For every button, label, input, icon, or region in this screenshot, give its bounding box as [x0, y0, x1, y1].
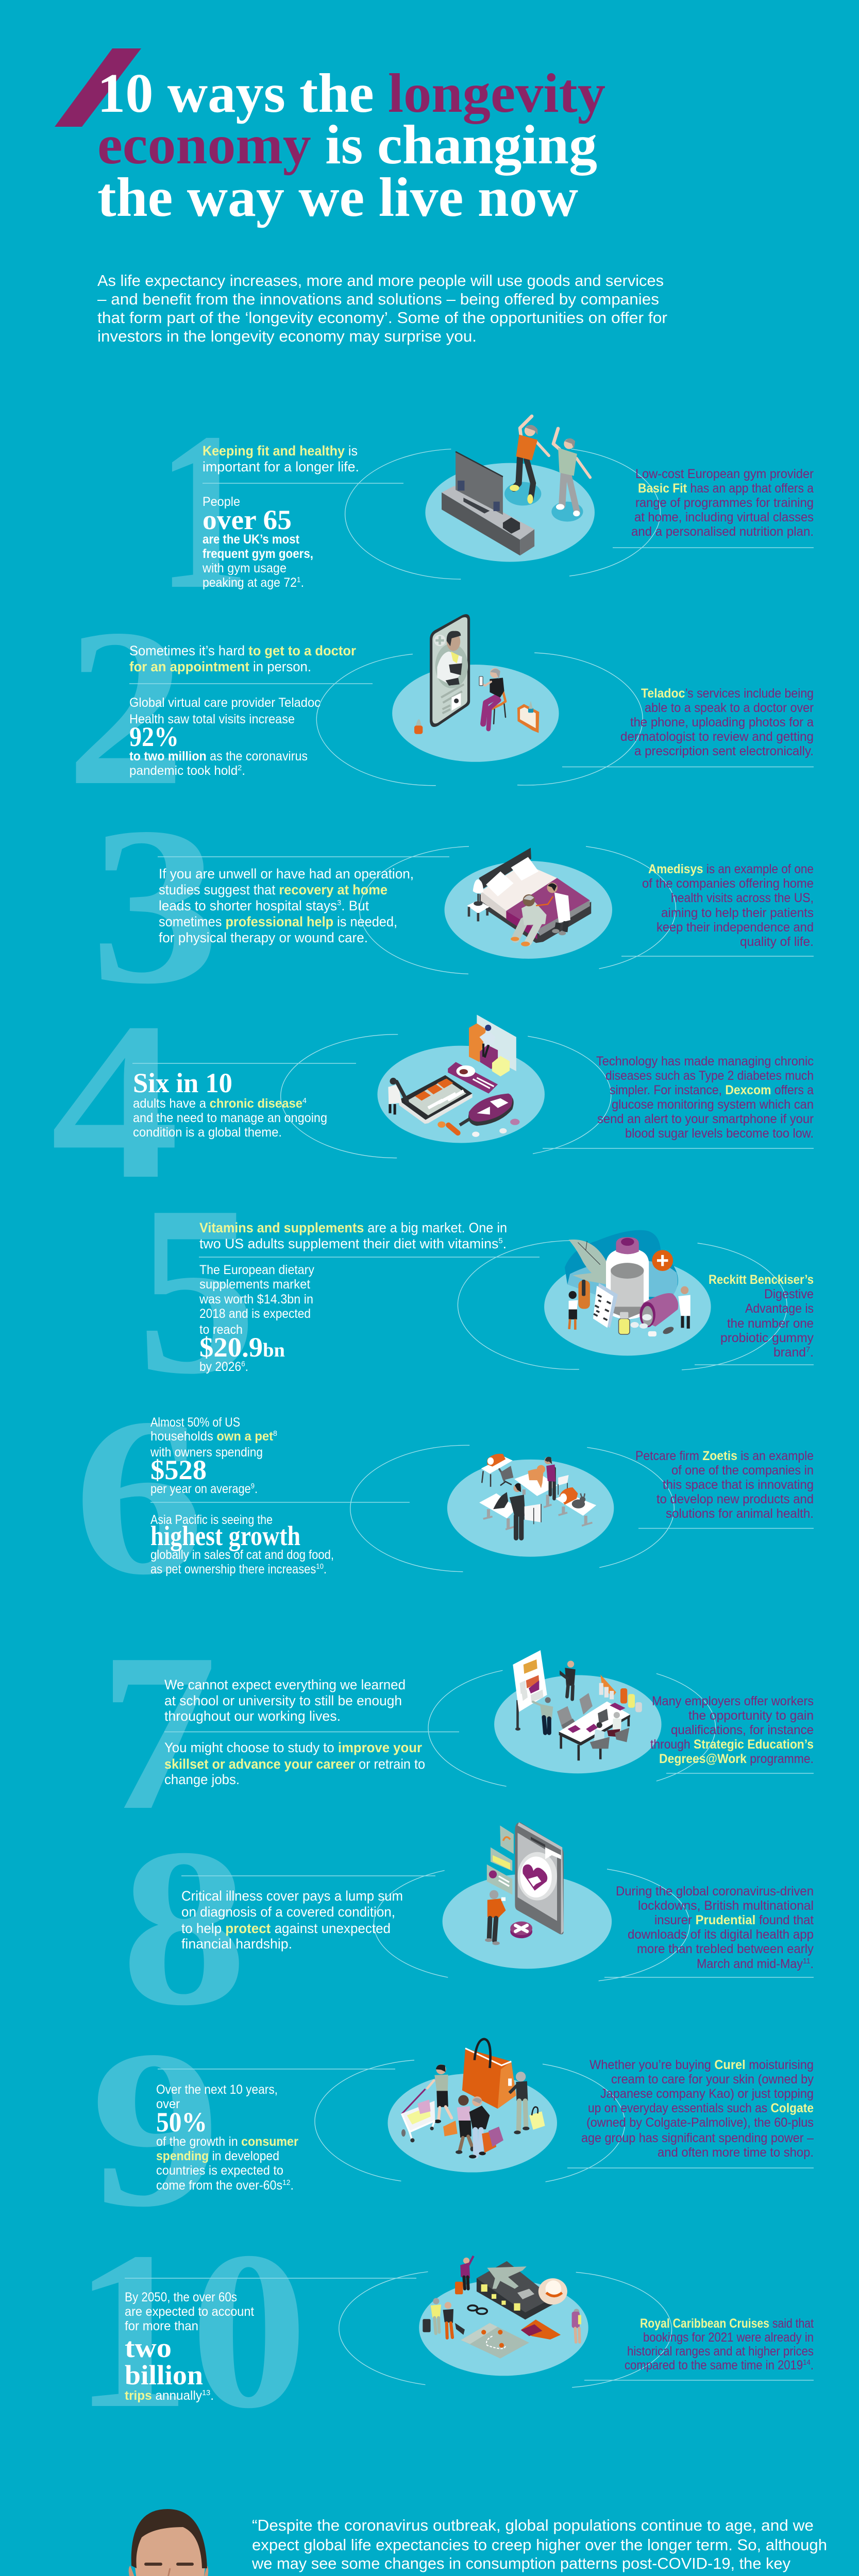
company note: Royal Caribbean: . — [811, 2358, 814, 2372]
company note: Zoetis: Petcare firm Zoetis is an example — [635, 1449, 814, 1463]
company note: Dexcom: glucose monitoring system which can — [612, 1097, 814, 1112]
stat: two billion trips: . — [210, 2388, 214, 2403]
company note: Prudential: more than trebled between early — [637, 1942, 814, 1956]
text: recovery at home: sometimes professional help is needed, — [159, 914, 397, 929]
text: critical illness: to help protect against unexpected — [181, 1921, 391, 1936]
company note: Curel and Colgate: (owned by Colgate-Palmolive), the 60-plus — [586, 2115, 814, 2130]
company note: Prudential: downloads of its digital health app — [628, 1927, 814, 1942]
company note: Reckitt Benckiser: Digestive — [764, 1287, 814, 1301]
text: keep learning: We cannot expect everything we learned — [164, 1677, 406, 1692]
stat: highest growth: globally in sales of cat and dog food, — [150, 1548, 334, 1562]
text: vitamins and supplements — [199, 1220, 540, 1257]
stat: $20.9bn: by 2026 — [199, 1360, 245, 1374]
numeral 3: 3 — [90, 781, 220, 1030]
panel: item 7 lifelong learning — [99, 1607, 814, 1857]
company note: Teladoc: a prescription sent electronically. — [634, 744, 814, 758]
numeral 6: 6 — [74, 1371, 205, 1621]
stat: over 65: 1 — [297, 575, 301, 584]
company note: Reckitt Benckiser — [695, 1273, 814, 1365]
company note: Prudential: During the global coronavirus-driven — [616, 1884, 814, 1899]
stat: 50%: . — [291, 2178, 294, 2193]
stat: own a pet — [150, 1415, 410, 1502]
panel: item 8 critical illness cover — [121, 1802, 814, 2052]
company note: Reckitt Benckiser: Reckitt Benckiser’s — [709, 1273, 814, 1287]
stat: over 65: peaking at age 72 — [203, 575, 305, 590]
stat: own a pet: Almost 50% of US — [150, 1415, 240, 1430]
company note: Teladoc: the phone, uploading photos for a — [630, 715, 814, 730]
illustration: woman consulting doctor on phone — [316, 614, 643, 786]
illustration: glucose monitor and smartphone — [281, 1014, 611, 1158]
stat: $20.9bn: was worth $14.3bn in — [199, 1292, 313, 1307]
stat: over 65: with gym usage — [202, 561, 287, 575]
company note: Dexcom: simpler. For instance, Dexcom offers a — [610, 1083, 814, 1097]
stat: two billion trips: By 2050, the over 60s — [125, 2290, 237, 2304]
company note: Amedisys: of the companies offering home — [642, 876, 814, 891]
stat: six in 10: Six in 10 — [133, 1067, 232, 1098]
stat: $20.9bn: $20.9bn — [199, 1332, 285, 1363]
intro text: – and benefit from the innovations and solutions – being offered by companies — [97, 290, 659, 308]
intro text: As life expectancy increases, more and more people will use goods and services — [97, 272, 664, 290]
stat: two billion trips: 13 — [202, 2388, 210, 2397]
company note: Royal Caribbean: compared to the same time in 2019 — [625, 2358, 827, 2372]
text: vitamins and supplements: . — [503, 1236, 507, 1251]
stat: highest growth: highest growth — [150, 1520, 300, 1551]
stat: 50%: countries is expected to — [156, 2163, 283, 2178]
company note: Reckitt Benckiser: the number one — [727, 1316, 814, 1331]
text: recovery at home: studies suggest that recovery at home — [159, 882, 388, 897]
stat: highest growth: 10 — [316, 1562, 324, 1571]
stat: own a pet: 8 — [273, 1429, 277, 1438]
text: vitamins and supplements: Vitamins and supplements are a big market. One in — [199, 1220, 507, 1235]
illustration: veterinary clinic — [350, 1445, 674, 1572]
stat: 92%: to two million as the coronavirus — [129, 749, 308, 764]
text: keep learning: change jobs. — [164, 1772, 240, 1787]
stat: two billion trips: billion — [125, 2360, 203, 2391]
stat: over 65: People — [203, 495, 240, 509]
text: recovery at home: If you are unwell or have had an operation, — [159, 866, 414, 882]
company note: Prudential: lockdowns, British multinational — [638, 1899, 814, 1913]
numeral 2: 2 — [66, 582, 186, 832]
numeral 8: 8 — [121, 1802, 247, 2052]
company note: Curel and Colgate: cream to care for your skin (owned by — [611, 2072, 814, 2087]
text: critical illness — [181, 1876, 435, 1952]
stat: 92%: 2 — [238, 764, 242, 772]
stat: over 65: are the UK’s most — [203, 532, 300, 547]
company note: Curel and Colgate: age group has significant spending power – — [581, 2131, 814, 2145]
title block: economy is changing — [97, 114, 597, 176]
company note: Strategic Education — [650, 1694, 814, 1773]
stat: own a pet: with owners spending — [150, 1445, 263, 1460]
company note: Prudential: . — [811, 1957, 814, 1971]
quote: “Despite the coronavirus outbreak, global populations continue to age, and we — [252, 2516, 814, 2534]
stat: highest growth — [150, 1513, 334, 1577]
company note: Strategic Education: through Strategic Education’s — [650, 1737, 814, 1752]
company note: Curel and Colgate: and often more time to shop. — [658, 2145, 814, 2160]
company note: Amedisys: Amedisys is an example of one — [648, 862, 814, 876]
company note: Prudential: 11 — [803, 1957, 811, 1965]
stat: 50%: 12 — [282, 2178, 291, 2187]
numeral 10: 10 — [73, 2205, 308, 2455]
company note: Zoetis: of one of the companies in — [671, 1463, 814, 1478]
company note: Reckitt Benckiser: probiotic gummy — [720, 1331, 814, 1345]
company note: Curel and Colgate: Whether you’re buying Curel moisturising — [589, 2058, 814, 2072]
text: recovery at home: for physical therapy or wound care. — [159, 930, 368, 945]
stat: own a pet: 9 — [251, 1482, 255, 1490]
company note: Zoetis — [635, 1449, 814, 1528]
company note: Basic Fit: Low-cost European gym provider — [635, 467, 814, 481]
quote: we may see some changes in consumption patterns post-COVID-19, the key — [251, 2554, 790, 2572]
company note: Teladoc: able to a speak to a doctor over — [645, 701, 814, 715]
stat: own a pet: per year on average — [150, 1482, 266, 1496]
company note: Amedisys: keep their independence and — [656, 920, 814, 935]
stat: 92%: Health saw total visits increase — [129, 712, 295, 726]
stat: 50%: over — [156, 2097, 180, 2111]
company note: Dexcom: Technology has made managing chronic — [596, 1054, 814, 1069]
stat: highest growth: Asia Pacific is seeing the — [150, 1513, 273, 1527]
illustration: couple exercising in front of a TV — [345, 416, 660, 579]
stat: two billion trips: two — [125, 2332, 172, 2363]
company note: Curel and Colgate — [567, 2058, 814, 2168]
company note: Basic Fit: and a personalised nutrition plan. — [631, 524, 814, 539]
title block: 10 ways the longevity — [97, 63, 605, 124]
stat: $20.9bn: The European dietary — [199, 1263, 314, 1277]
company note: Strategic Education: the opportunity to gain — [688, 1708, 814, 1723]
illustration: suitcase, map and travellers — [339, 2256, 672, 2387]
illustration: doctor visiting patient on a bed — [360, 846, 676, 974]
illustration: shoppers and giant bag — [315, 2039, 625, 2182]
company note: Reckitt Benckiser: Advantage is — [745, 1301, 814, 1316]
title block — [55, 48, 605, 228]
panel: item 10 travel — [73, 2205, 814, 2455]
stat: over 65 — [202, 495, 313, 590]
stat: highest growth: . — [324, 1562, 327, 1577]
company note: Royal Caribbean: 14 — [803, 2358, 811, 2367]
stat: 50%: come from the over-60s — [156, 2178, 292, 2193]
company note: Reckitt Benckiser: . — [810, 1345, 814, 1360]
text: critical illness: on diagnosis of a covered condition, — [181, 1904, 395, 1920]
company note: Basic Fit: Basic Fit has an app that offers a — [638, 481, 814, 496]
numeral 9: 9 — [91, 2004, 221, 2253]
company note: Amedisys: health visits across the US, — [671, 891, 814, 905]
stat: $20.9bn — [199, 1263, 314, 1374]
company note: Teladoc: Teladoc’s services include being — [641, 686, 814, 701]
stat: 92%: . — [242, 764, 245, 778]
text: keep learning: You might choose to study to improve your — [164, 1740, 422, 1755]
stat: 50%: of the growth in consumer — [156, 2134, 298, 2149]
intro text: investors in the longevity economy may surprise you. — [97, 327, 477, 345]
text: getting to a doctor: for an appointment in person. — [129, 659, 311, 674]
company note: Amedisys: aiming to help their patients — [661, 906, 814, 920]
numeral 4: 4 — [50, 976, 179, 1226]
stat: over 65: frequent gym goers, — [203, 547, 313, 561]
stat: $20.9bn: 6 — [241, 1360, 245, 1368]
stat: 50%: spending in developed — [156, 2149, 279, 2163]
text: keeping fit: important for a longer life. — [203, 459, 359, 474]
text: keep learning: at school or university to still be enough — [164, 1693, 402, 1708]
stat: own a pet: households own a pet — [150, 1429, 276, 1444]
company note: Dexcom: blood sugar levels become too low. — [625, 1126, 814, 1141]
stat: 92%: pandemic took hold — [129, 764, 241, 778]
text: vitamins and supplements: 5 — [498, 1236, 503, 1245]
stat: own a pet: $528 — [150, 1454, 207, 1485]
company note: Curel and Colgate: Japanese company Kao) or just topping — [600, 2087, 814, 2101]
stat: over 65: over 65 — [203, 504, 292, 535]
company note: Royal Caribbean: bookings for 2021 were already in — [643, 2330, 814, 2345]
stat: 50%: 50% — [156, 2107, 207, 2138]
stat: six in 10: 4 — [302, 1096, 307, 1105]
stat: $20.9bn: . — [245, 1360, 248, 1374]
company note: Basic Fit: at home, including virtual classes — [634, 510, 814, 524]
company note: Strategic Education: Degrees@Work programme. — [659, 1752, 814, 1766]
text: keeping fit: Keeping fit and healthy is — [203, 443, 358, 459]
numeral 5: 5 — [137, 1156, 257, 1424]
stat: two billion trips: for more than — [125, 2319, 198, 2333]
quote — [251, 2516, 827, 2576]
stat: six in 10: condition is a global theme. — [133, 1125, 282, 1140]
stat: six in 10 — [132, 1063, 356, 1140]
stat: highest growth: as pet ownership there increases — [150, 1562, 340, 1577]
stat: 92%: 92% — [129, 721, 179, 752]
company note: Zoetis: solutions for animal health. — [666, 1506, 814, 1521]
text: recovery at home: . But — [341, 898, 369, 913]
quote: expect global life expectancies to creep higher over the longer term. So, although — [252, 2536, 827, 2554]
stat: $20.9bn: to reach — [199, 1323, 243, 1337]
stat: six in 10: adults have a chronic disease — [133, 1096, 307, 1111]
stat: over 65: . — [301, 575, 304, 590]
company note: Amedisys — [621, 862, 814, 956]
panel: item 4 chronic disease — [50, 976, 814, 1226]
panel: item 3 recovery at home — [90, 781, 814, 1030]
illustration: health app on giant smartphone — [374, 1822, 689, 1981]
company note: Strategic Education: Many employers offer workers — [652, 1694, 814, 1708]
company note: Zoetis: to develop new products and — [656, 1492, 814, 1506]
stat: 92%: Global virtual care provider Teladoc — [129, 696, 321, 710]
stat: two billion trips: are expected to account — [125, 2304, 254, 2319]
company note: Dexcom: diseases such as Type 2 diabetes much — [605, 1069, 814, 1083]
illustration: supplement bottles — [458, 1230, 787, 1370]
company note: Dexcom — [543, 1054, 814, 1148]
company note: Reckitt Benckiser: 7 — [806, 1345, 810, 1354]
company note: Dexcom: send an alert to your smartphone if your — [597, 1112, 814, 1126]
panel: item 5 vitamins — [137, 1156, 814, 1424]
text: recovery at home: leads to shorter hospital stays — [159, 898, 343, 913]
text: critical illness: financial hardship. — [181, 1936, 292, 1952]
intro text — [97, 272, 667, 345]
illustration: training meeting room — [428, 1650, 716, 1786]
company note: Reckitt Benckiser: brand — [773, 1345, 806, 1360]
company note: Basic Fit: range of programmes for training — [635, 496, 814, 510]
text: keep learning — [164, 1677, 459, 1787]
company note: Strategic Education: qualifications, for instance — [671, 1723, 814, 1737]
text: getting to a doctor: Sometimes it’s hard to get to a doctor — [129, 643, 356, 658]
numeral 1: 1 — [157, 386, 250, 636]
company note: Prudential — [604, 1884, 814, 1977]
text: keeping fit — [203, 443, 403, 483]
title block: the way we live now — [97, 167, 578, 228]
stat: 50% — [156, 2069, 395, 2193]
stat: two billion trips — [125, 2278, 416, 2403]
panel: item 6 pets — [74, 1371, 814, 1621]
panel: item 9 consumer spending — [91, 2004, 814, 2253]
panel: item 2 virtual doctor — [66, 582, 814, 832]
company note: Royal Caribbean — [584, 2316, 814, 2380]
text: getting to a doctor — [129, 643, 373, 684]
company note: Teladoc — [562, 686, 814, 767]
intro text: that form part of the ‘longevity economy’. Some of the opportunities on offer for — [97, 309, 667, 327]
text: recovery at home: 3 — [337, 899, 341, 907]
text: keep learning: throughout our working lives. — [164, 1708, 341, 1724]
stat: 50%: Over the next 10 years, — [156, 2082, 278, 2097]
text: keep learning: skillset or advance your career or retrain to — [164, 1756, 425, 1772]
numeral 7: 7 — [99, 1607, 217, 1857]
text: critical illness: Critical illness cover pays a lump sum — [181, 1888, 403, 1904]
company note: Teladoc: dermatologist to review and getting — [620, 730, 814, 744]
company note: Amedisys: quality of life. — [740, 935, 814, 949]
company note: Royal Caribbean: historical ranges and at higher prices — [627, 2344, 814, 2359]
stat: two billion trips: trips annually — [125, 2388, 204, 2403]
company note: Prudential: March and mid-May — [697, 1957, 811, 1971]
stat: 92% — [129, 696, 321, 778]
company note: Basic Fit — [613, 467, 814, 548]
portrait: Peter Hughes — [97, 2509, 231, 2576]
panel: item 1 fitness — [157, 386, 814, 636]
text: vitamins and supplements: two US adults supplement their diet with vitamins — [199, 1236, 502, 1251]
company note: Curel and Colgate: up on everyday essentials such as Colgate — [588, 2101, 814, 2115]
stat: six in 10: and the need to manage an ongoing — [133, 1111, 327, 1125]
company note: Prudential: insurer Prudential found that — [654, 1913, 814, 1927]
stat: $20.9bn: 2018 and is expected — [199, 1307, 311, 1321]
company note: Zoetis: this space that is innovating — [663, 1478, 814, 1492]
stat: own a pet: . — [255, 1482, 258, 1496]
text: recovery at home — [158, 857, 449, 945]
stat: $20.9bn: supplements market — [199, 1277, 310, 1292]
company note: Royal Caribbean: Royal Caribbean Cruises said that — [640, 2316, 814, 2331]
